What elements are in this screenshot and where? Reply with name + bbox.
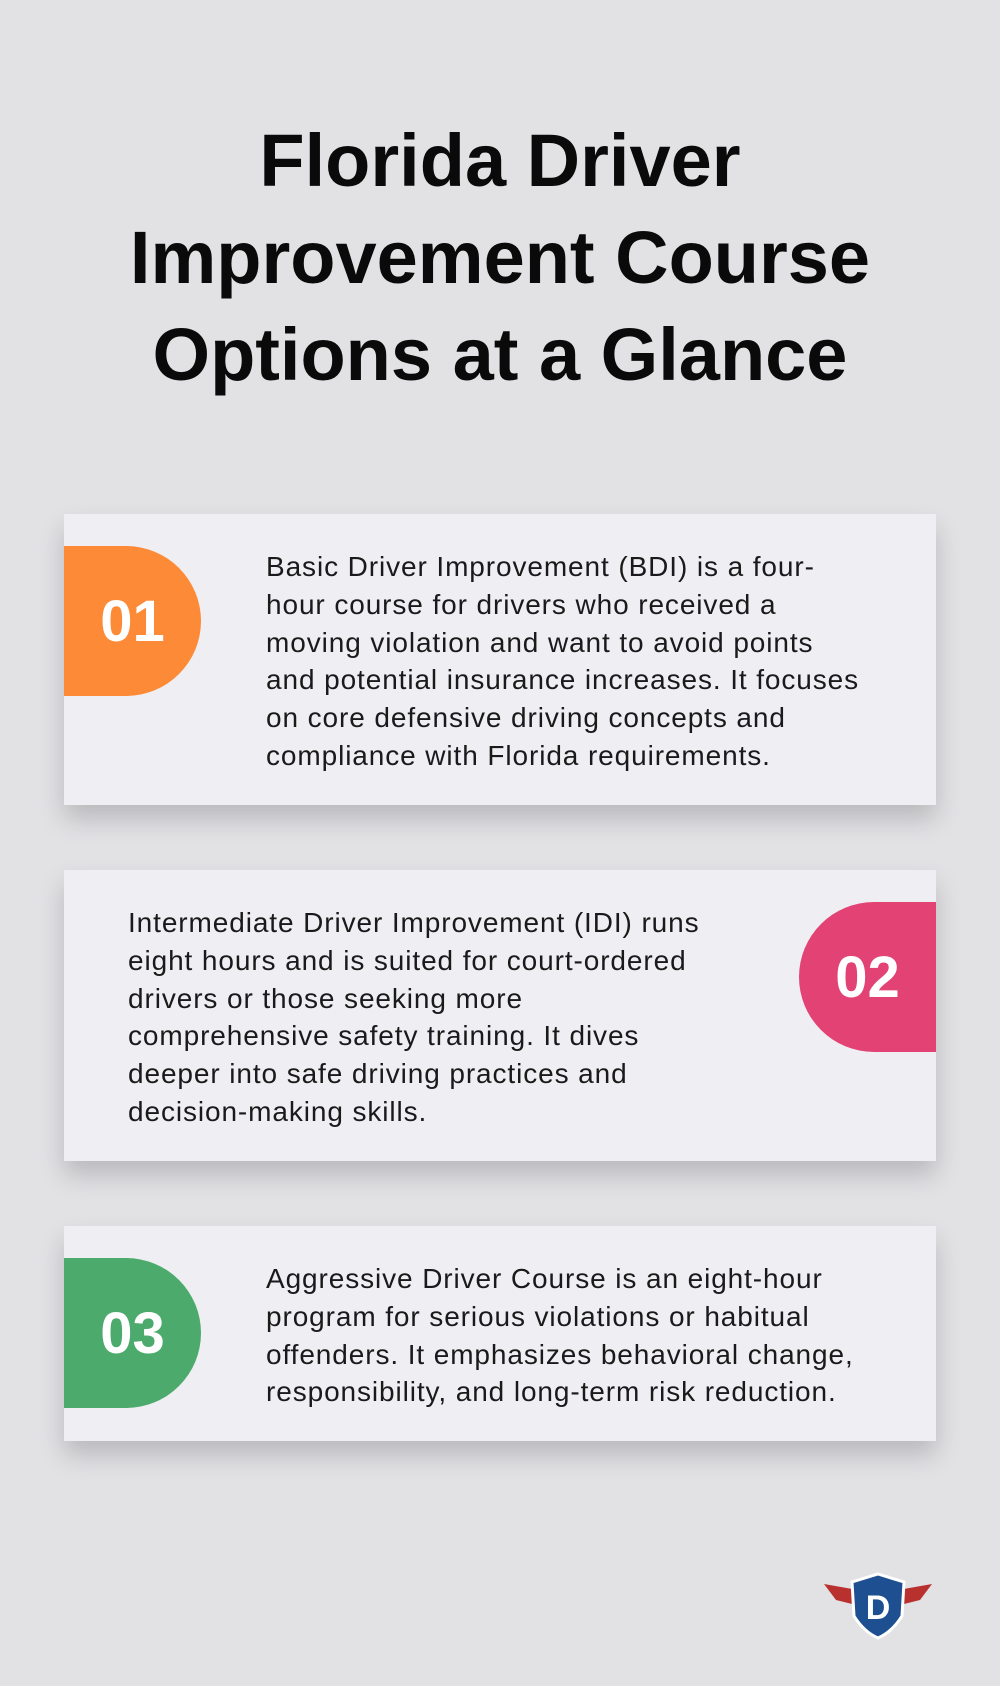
text 2 — [128, 907, 700, 1127]
text 1: Basic Driver Improvement (BDI) is a four- — [266, 551, 815, 582]
text 3 — [266, 1263, 854, 1407]
logo: D — [866, 1589, 890, 1627]
title: Florida Driver — [259, 119, 741, 202]
text 2: drivers or those seeking more — [128, 983, 523, 1014]
text 2: Intermediate Driver Improvement (IDI) runs — [128, 907, 700, 938]
text 1: compliance with Florida requirements. — [266, 740, 771, 771]
badge 02: 02 — [835, 944, 900, 1010]
text 1 — [266, 551, 859, 771]
text 1: on core defensive driving concepts and — [266, 702, 786, 733]
text 2: decision-making skills. — [128, 1096, 427, 1127]
text 2: eight hours and is suited for court-ordered — [128, 945, 687, 976]
card 2 — [64, 870, 936, 1161]
badge 03 — [64, 1258, 201, 1408]
text 2: comprehensive safety training. It dives — [128, 1020, 639, 1051]
text 3: responsibility, and long-term risk reduction. — [266, 1376, 837, 1407]
text 1: hour course for drivers who received a — [266, 589, 776, 620]
title: Options at a Glance — [153, 313, 847, 396]
badge 01: 01 — [100, 588, 165, 654]
text 3: program for serious violations or habitual — [266, 1301, 810, 1332]
text 1: and potential insurance increases. It focuses — [266, 664, 859, 695]
text 2: deeper into safe driving practices and — [128, 1058, 628, 1089]
text 1: moving violation and want to avoid points — [266, 627, 813, 658]
text 3: Aggressive Driver Course is an eight-hour — [266, 1263, 823, 1294]
card 1 — [64, 514, 936, 805]
badge 02 — [799, 902, 936, 1052]
text 3: offenders. It emphasizes behavioral change, — [266, 1339, 854, 1370]
title — [130, 119, 870, 396]
title: Improvement Course — [130, 216, 870, 299]
badge 03: 03 — [100, 1300, 165, 1366]
logo — [824, 1572, 932, 1640]
card 3 — [64, 1226, 936, 1441]
badge 01 — [64, 546, 201, 696]
